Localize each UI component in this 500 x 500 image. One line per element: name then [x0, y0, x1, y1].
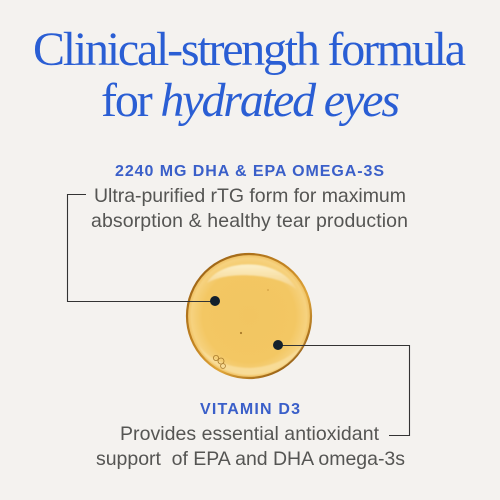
title — [33, 23, 466, 127]
text: omega-3 description — [91, 185, 408, 232]
text: vitamin D3 description: support of EPA and DHA omega-3s — [96, 448, 405, 470]
heading: vitamin D3: VITAMIN D3 — [200, 401, 300, 418]
text: vitamin D3 description: Provides essential antioxidant — [120, 423, 380, 445]
text: omega-3 description: Ultra-purified rTG form for maximum — [94, 185, 406, 207]
capsule: oil softgel — [187, 254, 311, 378]
callout: vitamin D3 connector — [278, 346, 410, 436]
text: omega-3 description: absorption & healthy tear production — [91, 210, 408, 232]
title: Clinical-strength formula — [33, 23, 466, 76]
callout: omega-3 connector — [68, 194, 215, 302]
heading: omega-3: 2240 MG DHA & EPA OMEGA-3S — [115, 163, 384, 180]
text: vitamin D3 description — [96, 423, 405, 470]
marker: omega-3 dot — [210, 296, 220, 306]
title: for hydrated eyes — [101, 74, 400, 127]
marker: vitamin D3 dot — [273, 340, 283, 350]
